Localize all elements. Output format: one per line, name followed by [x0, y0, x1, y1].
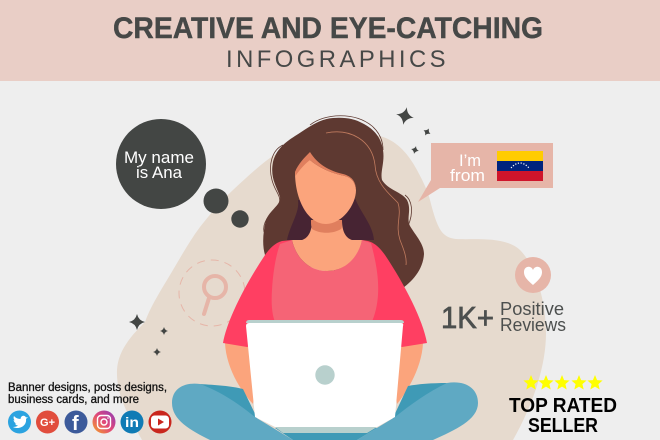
top rated seller badge: TOP RATED	[509, 395, 617, 417]
laptop logo	[315, 365, 335, 385]
character: woman with laptop	[172, 116, 478, 440]
reviews badge: Positive	[500, 299, 564, 319]
icon: magnifier	[179, 260, 245, 326]
icon: linkedin	[120, 410, 144, 434]
name thought bubble	[116, 119, 249, 228]
icon: google plus	[36, 410, 59, 434]
shirt body	[272, 240, 378, 326]
hair highlight	[326, 132, 406, 265]
name thought bubble: is Ana	[136, 163, 183, 182]
services text: Banner designs, posts designs,	[8, 382, 167, 394]
neck	[292, 220, 362, 271]
hair outline strands	[264, 116, 412, 232]
icon: google plus: G+	[40, 417, 55, 429]
decorative sparkles left	[129, 314, 168, 356]
services text	[8, 382, 167, 406]
icon: instagram	[92, 410, 116, 434]
name thought bubble: My name	[124, 148, 194, 167]
reviews badge	[441, 257, 566, 335]
header banner	[0, 0, 660, 81]
hair	[263, 118, 424, 290]
fringe shadow	[295, 152, 356, 190]
dark legs behind	[200, 383, 447, 420]
top rated seller badge	[509, 375, 617, 437]
icon: linkedin: in	[125, 414, 139, 430]
shirt sleeves	[223, 240, 427, 347]
title: CREATIVE AND EYE-CATCHING	[113, 12, 543, 45]
legs	[172, 384, 293, 440]
laptop	[246, 320, 404, 433]
speech bubble: origin	[418, 143, 553, 202]
icon: facebook: f	[72, 413, 79, 435]
arm right	[388, 343, 423, 404]
subtitle: INFOGRAPHICS	[226, 46, 449, 73]
decorative sparkles right	[394, 105, 432, 155]
icon: facebook	[64, 410, 88, 435]
background blob	[117, 132, 546, 440]
icon: twitter	[8, 410, 31, 434]
neck shadow	[311, 220, 342, 233]
reviews badge: Reviews	[500, 315, 566, 335]
speech bubble: origin: from	[450, 166, 485, 185]
icon: five stars	[523, 375, 603, 390]
face	[295, 160, 356, 224]
social icons	[8, 410, 172, 435]
speech bubble: origin: I’m	[459, 151, 481, 170]
dark hair behind neck	[287, 198, 374, 240]
icon: heart	[515, 257, 551, 293]
icon: Venezuelan flag	[497, 151, 543, 181]
reviews badge: 1K+	[441, 300, 494, 335]
icon: youtube	[148, 410, 172, 434]
top rated seller badge: SELLER	[528, 415, 598, 437]
arm left	[225, 343, 262, 404]
services text: business cards, and more	[8, 394, 139, 406]
